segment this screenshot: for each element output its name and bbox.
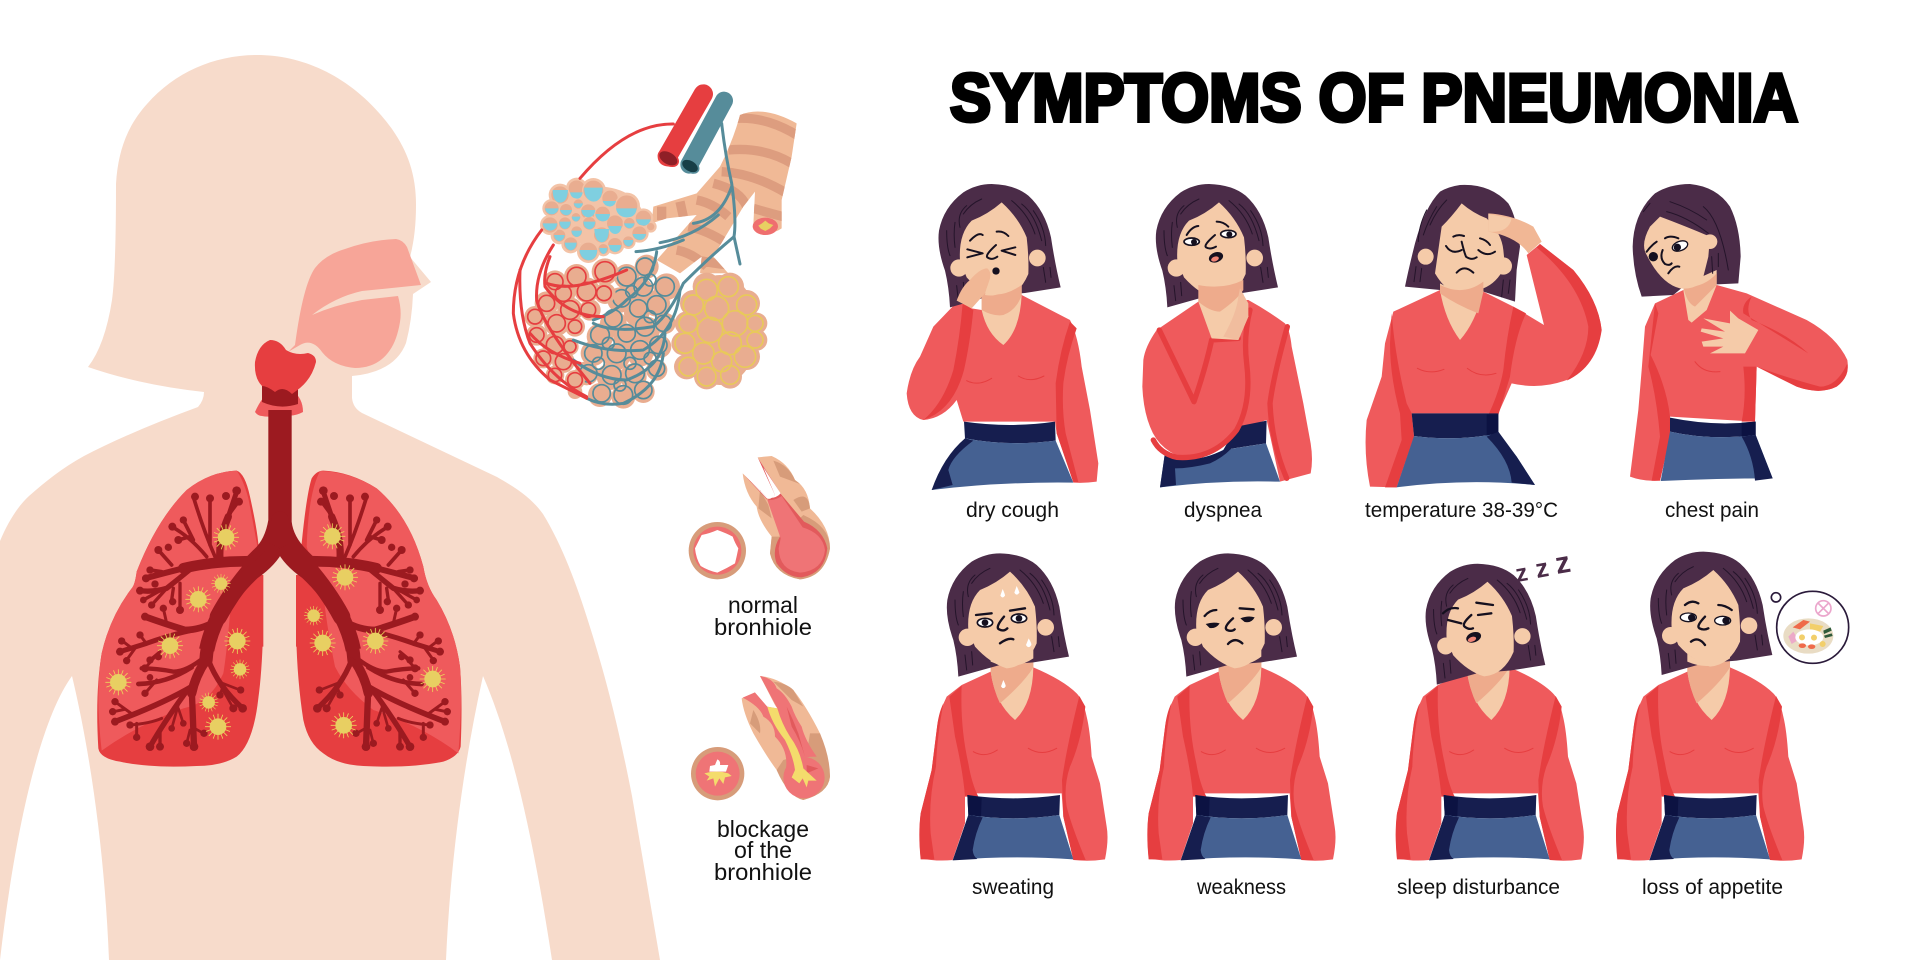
normal bronchiole <box>689 456 830 579</box>
symptom: loss of appetite <box>1616 552 1849 899</box>
red capillary alveoli <box>524 258 618 399</box>
symptom: temperature <box>1365 185 1602 522</box>
text: bronchiole labels: blockage <box>717 816 809 842</box>
label: temperature 38-39°C <box>1365 499 1558 522</box>
body silhouette <box>0 55 660 960</box>
symptom: chest pain <box>1630 184 1848 522</box>
text: bronchiole labels: bronhiole <box>714 859 812 885</box>
left lung light lobe <box>98 471 257 751</box>
red capillary arteries <box>513 124 673 398</box>
right lung <box>296 471 462 767</box>
title: SYMPTOMS OF PNEUMONIA <box>950 60 1798 136</box>
text: bronchiole labels: normal <box>728 592 798 618</box>
right bronchus over medial edge <box>283 547 353 650</box>
cross section <box>691 747 744 800</box>
zzz: z <box>1552 546 1573 581</box>
zzz <box>1513 546 1573 588</box>
symptom: sweating <box>919 553 1108 899</box>
label: sweating <box>972 876 1054 899</box>
left lung <box>97 471 263 767</box>
right lung light lobe <box>307 471 461 753</box>
symptom: dyspnea <box>1142 184 1312 522</box>
text: bronchiole labels: bronhiole <box>714 614 812 640</box>
zzz: z <box>1513 559 1530 588</box>
airway: nasal cavity <box>288 239 421 368</box>
label: weakness <box>1196 876 1286 899</box>
blood vessels <box>656 94 724 176</box>
right lung medial lobe edge <box>296 575 323 647</box>
virus particles <box>106 524 445 739</box>
blocked bronchiole <box>691 676 830 800</box>
left lung medial lobe edge <box>237 575 263 647</box>
lungs with infection <box>97 410 462 767</box>
split notch between bronchi <box>263 555 297 647</box>
longitudinal section <box>742 676 830 800</box>
yellow-meshed infected alveoli <box>671 273 767 389</box>
thought bubble with food <box>1771 591 1849 663</box>
teal capillary veins <box>573 123 740 404</box>
longitudinal section <box>743 456 830 579</box>
zzz: z <box>1533 552 1551 584</box>
label: chest pain <box>1665 499 1759 522</box>
text: bronchiole labels: of the <box>734 837 792 863</box>
label: dyspnea <box>1184 499 1262 522</box>
bronchial tree right <box>280 486 451 751</box>
left bronchus over medial edge <box>207 547 277 650</box>
symptom: sleep disturbance <box>1396 546 1584 899</box>
cross section <box>689 522 746 579</box>
alveoli illustration <box>513 94 807 409</box>
bronchial tree left <box>109 486 280 751</box>
label: sleep disturbance <box>1397 876 1560 899</box>
label: dry cough <box>966 499 1059 522</box>
teal capillary alveoli <box>575 255 680 409</box>
symptom: weakness <box>1147 553 1336 899</box>
bronchus <box>652 112 796 274</box>
trachea <box>240 410 320 564</box>
text: bronchiole labels <box>714 592 812 885</box>
label: loss of appetite <box>1642 876 1783 899</box>
larynx <box>255 340 316 417</box>
symptom: dry cough <box>907 184 1098 522</box>
fluid-filled alveoli <box>540 178 657 263</box>
